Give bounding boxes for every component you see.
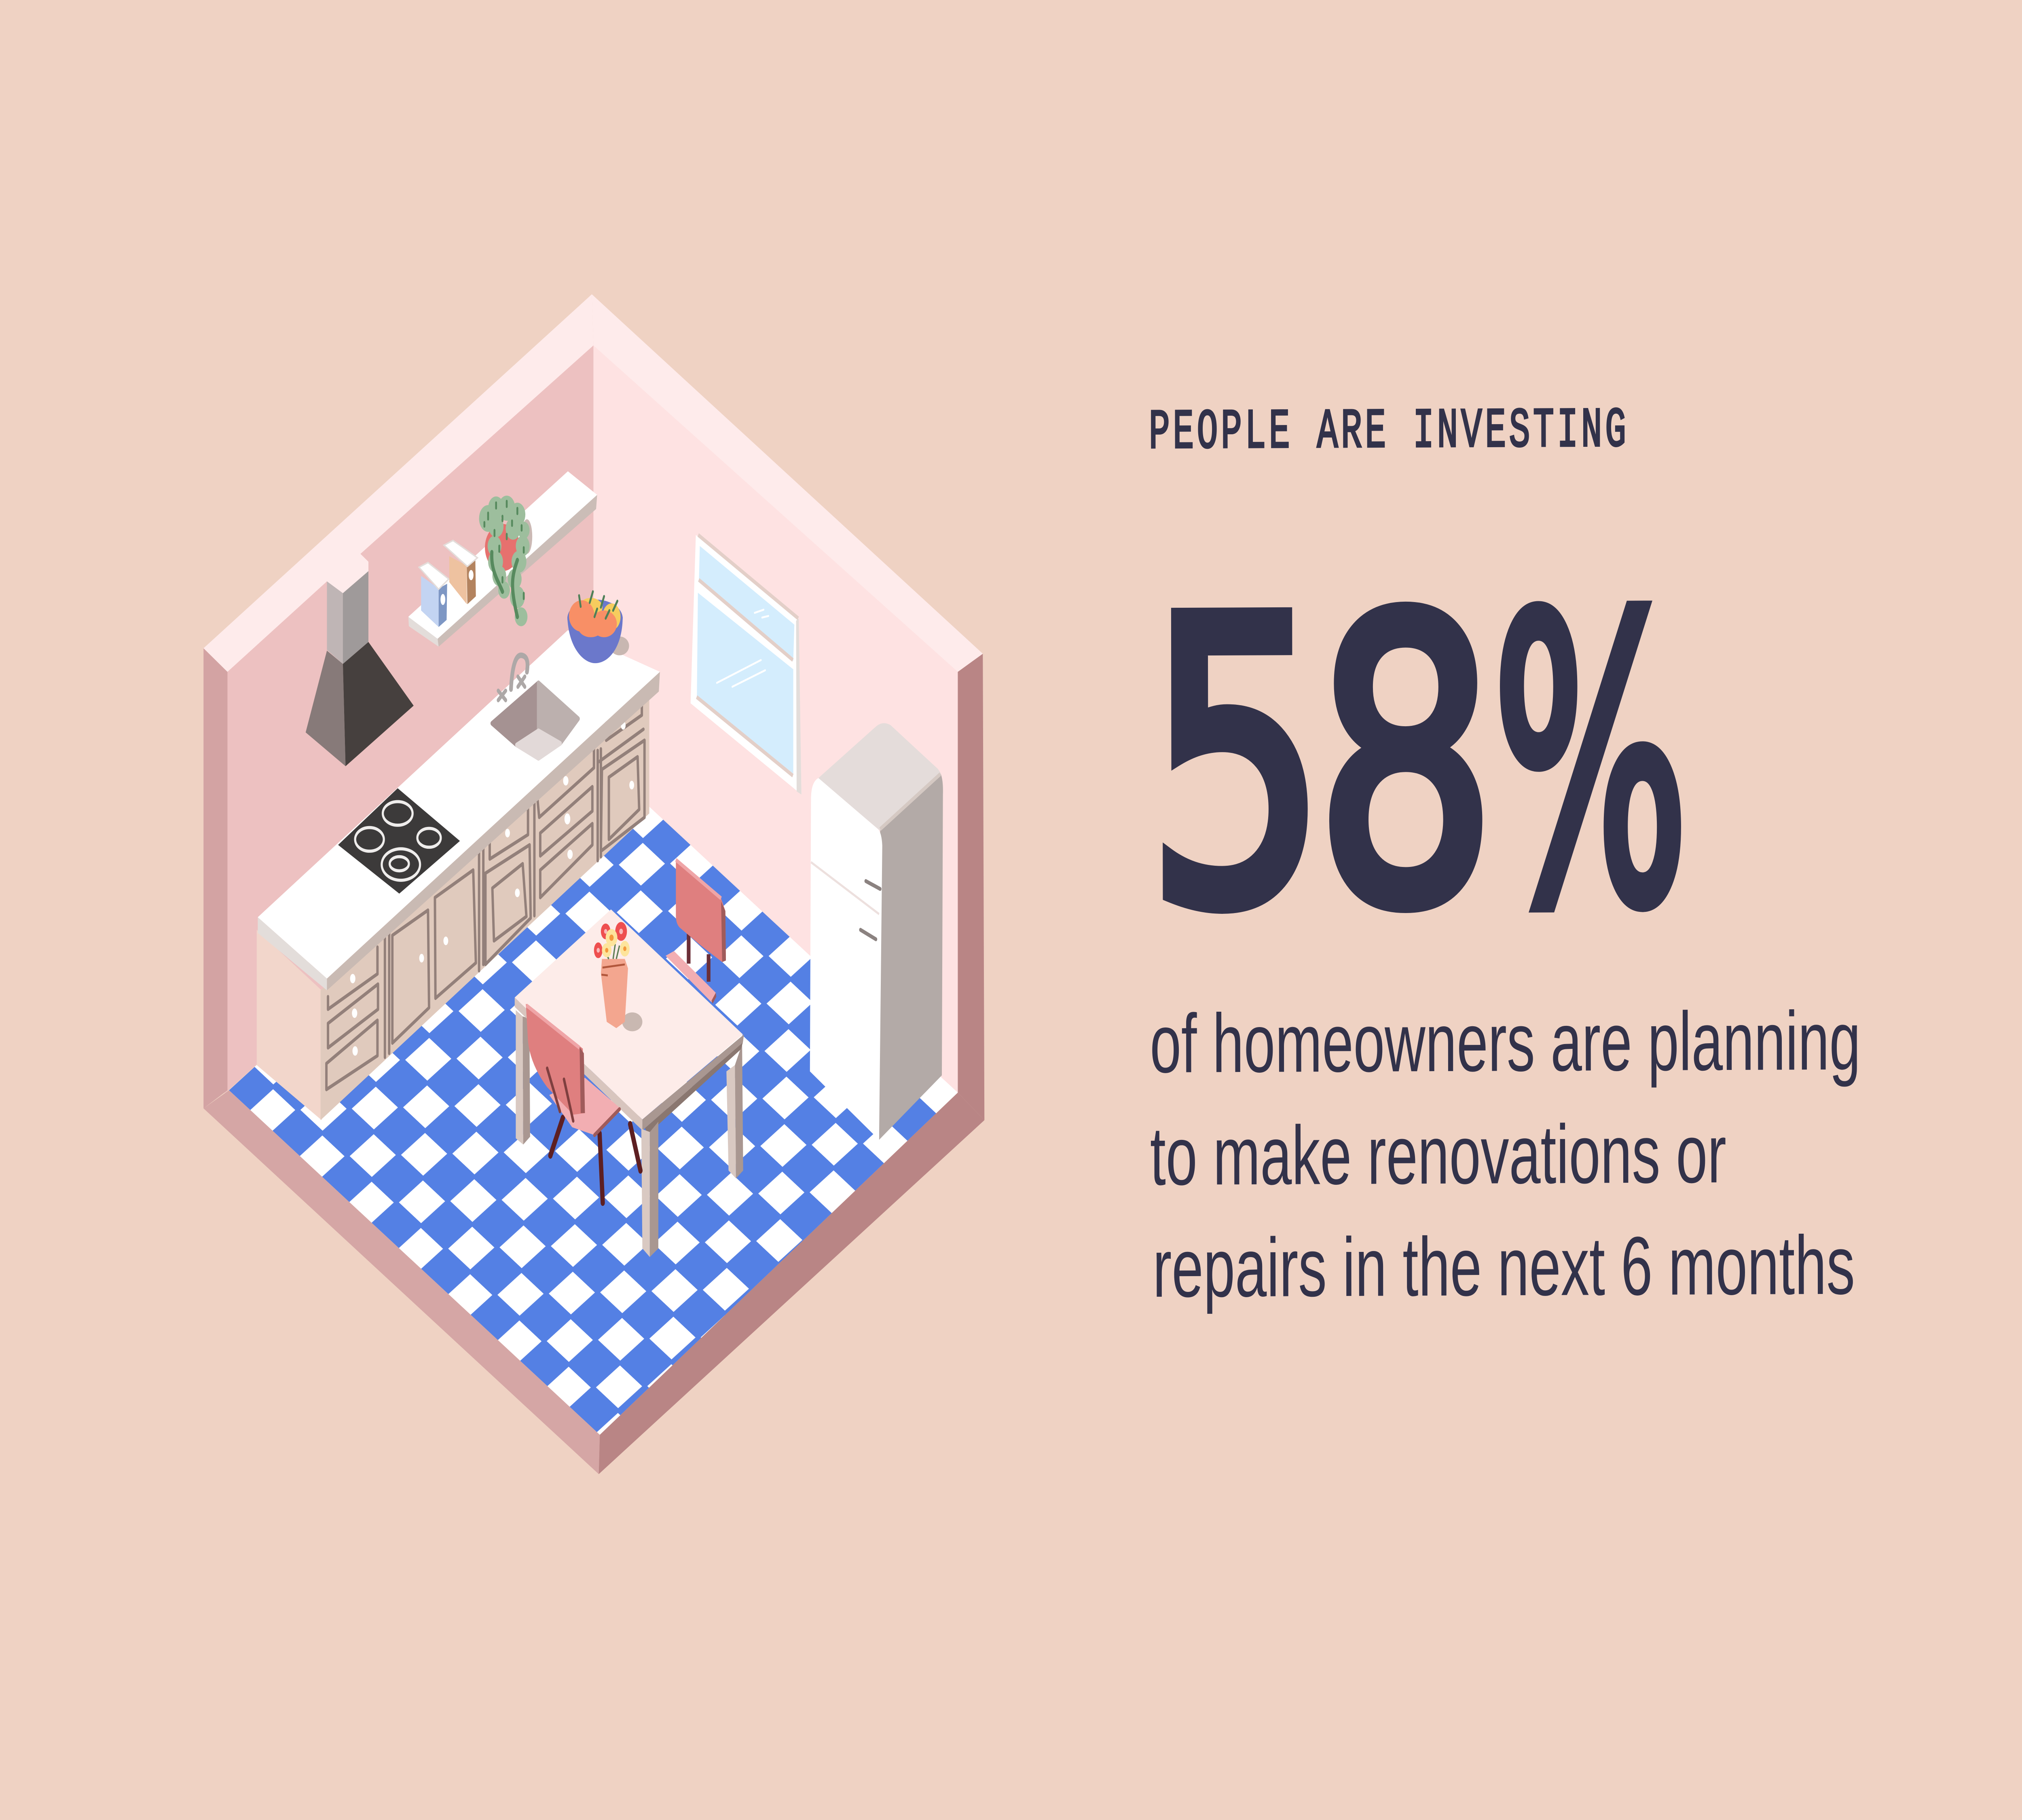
refrigerator [810,723,943,1140]
hood chimney left [327,581,343,664]
far chair back edge [721,902,726,962]
wall shelf [408,471,597,647]
near chair back top [527,1005,580,1048]
back left leg [516,1010,523,1145]
table top [515,909,743,1119]
window sills [697,535,798,776]
table underside [645,1042,743,1134]
frame side [796,618,802,795]
big statistic: 58 [1146,537,1496,993]
far chair legs [689,934,709,982]
left wall end cap [203,648,227,1108]
fruit bowl [567,592,629,663]
room shell [203,294,984,1474]
faucet [498,655,527,700]
left wall top rim [203,294,593,672]
far chair seat [666,951,716,1002]
cooktop [338,788,460,894]
window frame [691,535,802,795]
big statistic [1146,536,1689,993]
description text [1150,995,1861,1315]
hanging plant [479,496,532,626]
isometric kitchen illustration [203,294,984,1474]
eyebrow heading: PEOPLE ARE INVESTING [1149,399,1626,465]
window [691,535,802,795]
hood body left [306,651,345,766]
countertop [258,630,660,990]
table edge left [515,998,642,1131]
fridge door line [811,862,879,914]
text column [1146,398,1861,1315]
counter front edge [327,672,660,990]
near chair back [526,1004,585,1115]
orange canister [444,541,478,604]
hood body right [343,642,414,766]
left base front [203,1090,600,1474]
dining table [515,909,744,1257]
left wall face [225,342,593,1093]
far chair back top [676,860,721,898]
upper glass [699,546,794,661]
right wall end cap [958,654,984,1120]
big statistic: % [1492,536,1689,992]
description text: to make renovations or [1150,1108,1726,1203]
near chair seat [549,1078,620,1135]
blue canister [419,562,449,627]
right wall face [593,342,960,1095]
near chair back edge [580,1047,585,1113]
back right leg [726,1065,736,1178]
glass reflections [717,610,768,687]
shelf top [408,471,597,640]
checkerboard floor [229,756,958,1435]
fridge side [879,772,943,1140]
description text: of homeowners are planning [1150,995,1861,1090]
fridge front [810,778,882,1140]
base cabinets [257,695,649,1120]
far chair back [676,860,726,962]
shelf front [438,495,597,647]
fridge handles [861,881,880,939]
cabinet end panel [257,930,321,1120]
near chair [526,1004,641,1203]
hood chimney right [343,571,368,664]
fridge top edge [880,774,940,829]
fridge top [819,723,941,831]
flowers [594,922,630,958]
cabinet door and drawer outlines [326,702,645,1089]
far chair [666,860,726,1004]
cabinet knobs [350,721,634,1056]
right wall top rim [592,294,983,672]
shelf side [408,617,439,647]
range hood [306,571,414,766]
right base front [599,1093,984,1474]
sink [492,683,578,758]
table edge right [642,1034,744,1131]
flower vase [594,922,642,1031]
counter surface [258,630,660,979]
description text: repairs in the next 6 months [1153,1219,1855,1315]
lower glass [697,593,793,774]
counter side edge [258,917,327,990]
near chair supports [547,1068,573,1121]
cabinet front [321,695,649,1120]
near chair legs [550,1118,641,1203]
front leg [641,1129,650,1257]
